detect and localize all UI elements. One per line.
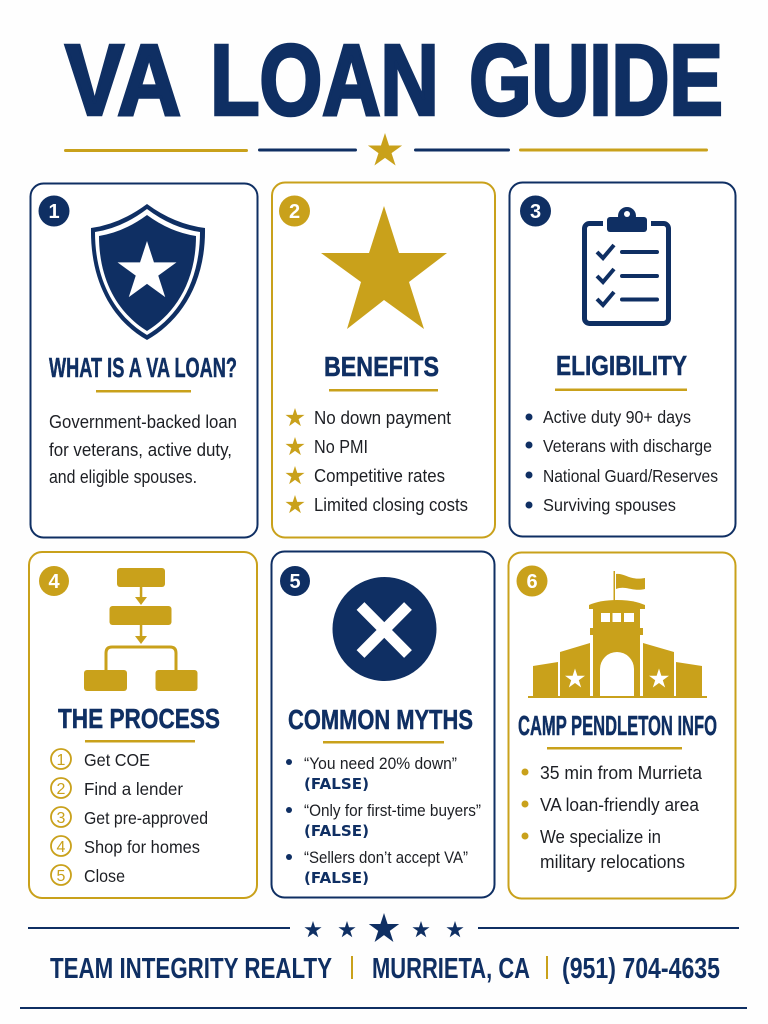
camp pendleton list: military relocations xyxy=(540,852,685,872)
number badge 2 xyxy=(279,196,310,226)
heading: COMMON MYTHS xyxy=(288,704,473,735)
panel: benefits xyxy=(272,182,495,538)
myths list: “Sellers don’t accept VA” xyxy=(304,849,468,867)
eligibility list: Veterans with discharge xyxy=(543,436,712,456)
footer star divider xyxy=(28,913,739,942)
process steps: Get pre-approved xyxy=(84,808,208,828)
myths list: (FALSE) xyxy=(304,869,369,887)
heading: BENEFITS xyxy=(324,351,439,382)
icon: clipboard checklist xyxy=(584,207,668,324)
description text: and eligible spouses. xyxy=(49,467,197,487)
number badge 6: 6 xyxy=(526,571,538,593)
title divider with star xyxy=(64,133,708,166)
process steps: 3 xyxy=(57,810,66,827)
myths list: (FALSE) xyxy=(304,775,369,793)
process steps: Close xyxy=(84,866,125,886)
myths list xyxy=(286,755,481,887)
number badge 5 xyxy=(280,566,310,596)
camp pendleton list: 35 min from Murrieta xyxy=(540,763,703,783)
eligibility list xyxy=(526,407,718,515)
icon: flowchart xyxy=(84,568,198,691)
number badge 1: 1 xyxy=(48,201,60,223)
process steps xyxy=(51,749,208,886)
process steps: 5 xyxy=(57,868,66,885)
description text: for veterans, active duty, xyxy=(49,440,232,460)
description text: Government-backed loan xyxy=(49,412,237,432)
camp pendleton list xyxy=(522,763,703,872)
number badge 4: 4 xyxy=(48,571,60,593)
icon: X in circle xyxy=(332,577,436,681)
number badge 5: 5 xyxy=(289,571,301,593)
eligibility list: Surviving spouses xyxy=(543,495,676,515)
number badge 2: 2 xyxy=(289,201,300,223)
number badge 1 xyxy=(38,196,70,226)
process steps: Get COE xyxy=(84,750,150,770)
process steps: Shop for homes xyxy=(84,837,200,857)
number badge 3: 3 xyxy=(530,201,541,223)
camp pendleton list: VA loan-friendly area xyxy=(540,795,700,815)
number badge 4 xyxy=(39,566,69,596)
footer contact line: MURRIETA, CA xyxy=(372,953,530,985)
footer contact line: (951) 704-4635 xyxy=(562,953,720,985)
eligibility list: National Guard/Reserves xyxy=(543,466,718,486)
myths list: “Only for first-time buyers” xyxy=(304,802,481,820)
panel: the process xyxy=(29,552,257,898)
camp pendleton list: We specialize in xyxy=(540,827,661,847)
process steps: 2 xyxy=(57,781,66,798)
eligibility list: Active duty 90+ days xyxy=(543,407,691,427)
process steps: 1 xyxy=(57,752,66,769)
title: VA xyxy=(65,24,181,136)
heading: WHAT IS A VA LOAN? xyxy=(49,352,237,383)
description text xyxy=(49,412,237,487)
icon: shield with star xyxy=(91,204,205,340)
benefits list xyxy=(285,408,468,515)
benefits list: No PMI xyxy=(314,437,368,457)
heading: THE PROCESS xyxy=(58,703,220,734)
panel: what is a VA loan xyxy=(30,184,258,538)
panel: eligibility xyxy=(510,182,736,536)
heading: ELIGIBILITY xyxy=(556,350,687,381)
myths list: (FALSE) xyxy=(304,822,369,840)
number badge 6 xyxy=(516,566,548,596)
benefits list: Competitive rates xyxy=(314,466,445,486)
myths list: “You need 20% down” xyxy=(304,755,457,773)
panel: common myths xyxy=(272,552,494,898)
process steps: Find a lender xyxy=(84,779,183,799)
benefits list: Limited closing costs xyxy=(314,495,468,515)
icon: base gate with tower and flag xyxy=(528,571,707,698)
icon: large star xyxy=(321,206,447,329)
process steps: 4 xyxy=(57,839,66,856)
panel: camp pendleton info xyxy=(508,552,736,898)
benefits list: No down payment xyxy=(314,408,451,428)
footer contact line: TEAM INTEGRITY REALTY xyxy=(50,953,332,985)
number badge 3 xyxy=(520,196,551,226)
footer contact line xyxy=(50,953,720,985)
